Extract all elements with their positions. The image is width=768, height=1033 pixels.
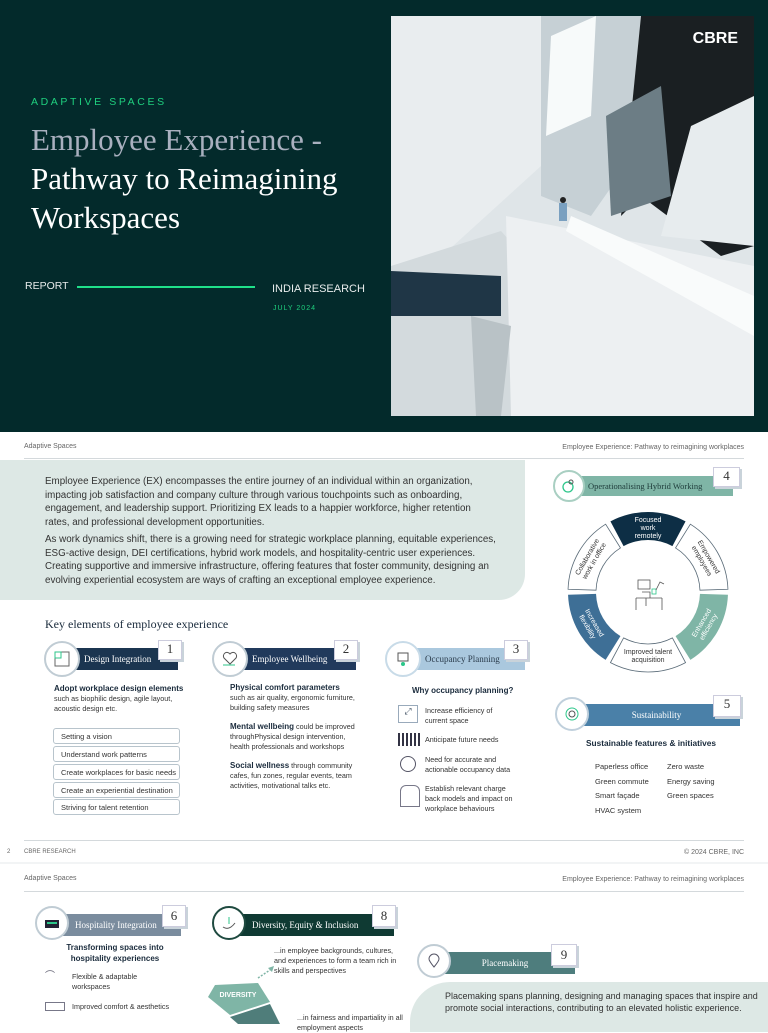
sustainability features: Sustainable features & initiatives	[586, 738, 716, 748]
banner 6: Hospitality Integration	[75, 920, 157, 930]
hybrid ring diagram: Focused	[635, 517, 662, 524]
number 9	[551, 944, 577, 966]
banner 5: Sustainability	[632, 710, 681, 720]
hospitality text: hospitality experiences	[71, 954, 159, 963]
hospitality text	[66, 943, 164, 963]
placemaking panel: Placemaking spans planning, designing and managing spaces that inspire and promote social interactions, contributing to an elevated holistic experience.	[445, 991, 758, 1013]
text: CBRE RESEARCH	[24, 849, 76, 855]
text: Green commute	[595, 776, 649, 786]
text: Increase efficiency of	[425, 706, 492, 715]
icon circle 4	[553, 470, 585, 502]
hybrid ring diagram: efficiency	[699, 612, 720, 642]
icon circle 2	[212, 641, 248, 677]
hybrid ring diagram: work	[640, 525, 656, 532]
text: Paperless office	[595, 762, 648, 771]
banner 8	[230, 914, 394, 936]
number 1: 1	[167, 641, 173, 656]
hybrid ring diagram: work in office	[581, 542, 608, 582]
text: 2	[7, 849, 10, 855]
icon circle 9	[417, 944, 451, 978]
number 4	[713, 467, 740, 487]
icon circle 3	[385, 641, 421, 677]
india research label: INDIA RESEARCH	[272, 283, 365, 295]
text: workspaces	[72, 982, 110, 991]
page 2 header: Adaptive Spaces	[24, 443, 77, 450]
cover title: Workspaces	[31, 200, 180, 235]
text: Energy saving	[667, 776, 715, 786]
hybrid ring diagram: Increased	[583, 608, 605, 638]
cover title: Employee Experience -	[31, 122, 322, 157]
text: ⌒	[45, 971, 55, 982]
banner 5	[573, 704, 740, 726]
wellbeing text: such as air quality, ergonomic furniture, building safety measures	[230, 693, 355, 712]
banner 4	[571, 476, 733, 496]
card 8: diversity, equity & inclusion	[212, 905, 398, 940]
text: Employee Experience: Pathway to reimagining workplaces	[562, 444, 744, 451]
DEI text: equity: ...in fairness and impartiality in all employment aspects	[297, 1013, 403, 1032]
text: Establish relevant charge	[425, 784, 506, 793]
icon circle 1	[44, 641, 80, 677]
sustainability features	[586, 738, 716, 814]
text: back models and impact on	[425, 794, 512, 803]
number 3	[504, 640, 528, 660]
text: Anticipate future needs	[425, 735, 499, 744]
DEI arc chart: DIVERSITY	[220, 992, 257, 999]
text: ⤢	[404, 706, 412, 716]
page 2 footer	[24, 840, 744, 841]
card 9: placemaking	[417, 944, 579, 978]
number 5: 5	[724, 696, 730, 711]
cover title: Pathway to Reimagining	[31, 161, 338, 196]
hybrid ring diagram: Collaborative	[575, 538, 601, 577]
text: current space	[425, 716, 469, 725]
banner 2	[230, 648, 356, 670]
number 1	[158, 640, 182, 660]
cover title	[31, 122, 338, 235]
icon circle 6	[35, 906, 69, 940]
date: JULY 2024	[273, 305, 316, 312]
card 1: design integration	[44, 640, 184, 677]
text: Create workplaces for basic needs	[61, 768, 176, 777]
card 4: operationalising hybrid working	[553, 467, 742, 502]
banner 8: Diversity, Equity & Inclusion	[252, 920, 358, 930]
occupancy list: Why occupancy planning?	[412, 686, 513, 695]
hybrid ring diagram: employees	[690, 545, 713, 578]
text: Flexible & adaptable	[72, 972, 137, 981]
heading: key elements: Key elements of employee experience	[45, 617, 228, 631]
text: Understand work patterns	[61, 750, 147, 759]
banner 9: Placemaking	[482, 958, 528, 968]
text: actionable occupancy data	[425, 765, 510, 774]
hybrid ring diagram: flexibility	[577, 614, 597, 641]
number 2	[334, 640, 358, 660]
text: Setting a vision	[61, 732, 112, 741]
hybrid ring diagram: Improved talent	[624, 649, 672, 656]
text: Need for accurate and	[425, 755, 496, 764]
hybrid ring diagram: Enhanced	[691, 608, 713, 639]
wellbeing text	[230, 683, 355, 790]
banner 3	[403, 648, 525, 670]
wellbeing text: Mental wellbeing could be improved throughPhysical design intervention, health professionals and workshops	[230, 722, 355, 751]
hospitality items	[45, 970, 169, 1011]
DEI text: diversity: ...in employee backgrounds, cultures, and experiences to form a team rich in skills and perspectives	[274, 946, 396, 975]
banner 1	[62, 648, 178, 670]
banner 1: Design Integration	[84, 654, 151, 664]
wellbeing text: Social wellness through community cafes, fun zones, regular events, team activities, motivational talks etc.	[230, 761, 352, 790]
card 2: employee wellbeing	[212, 640, 360, 677]
DEI arc chart	[208, 966, 280, 1024]
icon circle 5	[555, 697, 589, 731]
number 3: 3	[513, 641, 519, 656]
page 3 header: Adaptive Spaces	[24, 875, 77, 882]
banner 6	[53, 914, 181, 936]
cover photo	[391, 16, 754, 416]
number 6: 6	[171, 908, 177, 923]
icon circle 8	[212, 906, 246, 940]
hybrid ring diagram: remotely	[635, 533, 662, 540]
text: Striving for talent retention	[61, 803, 149, 812]
text: Employee Experience: Pathway to reimagining workplaces	[562, 876, 744, 883]
number 4: 4	[723, 468, 730, 483]
number 2: 2	[343, 641, 349, 656]
banner 2: Employee Wellbeing	[252, 654, 327, 664]
card 3: occupancy planning	[385, 640, 530, 677]
number 9: 9	[561, 947, 567, 962]
logo: CBRE	[693, 30, 738, 47]
design integration text: Adopt workplace design elements such as biophilic design, agile layout, acoustic design etc.	[54, 684, 183, 713]
banner 9	[435, 952, 575, 974]
occupancy list	[398, 686, 513, 813]
hybrid ring diagram	[568, 512, 728, 672]
card 5: sustainability	[555, 695, 743, 731]
intro panel: Employee Experience (EX) encompasses the entire journey of an individual within an organization, impacting job satisfaction and company culture through various touchpoints such as onboarding, engagement, and leadership support. Prioritizing EX leads to a happier workforce, higher retention rates, and professional development opportunities.	[45, 476, 472, 528]
number 5	[713, 695, 741, 717]
text: Zero waste	[667, 762, 704, 771]
kicker: adaptive spaces: ADAPTIVE SPACES	[31, 96, 167, 108]
text: Smart façade	[595, 791, 640, 800]
card 6: hospitality integration	[35, 905, 188, 940]
text: workplace behaviours	[425, 804, 495, 813]
intro panel	[0, 460, 525, 600]
hybrid ring diagram: acquisition	[631, 657, 665, 664]
banner 3: Occupancy Planning	[425, 654, 500, 664]
green rule	[77, 286, 255, 288]
cover page background	[0, 0, 768, 432]
wellbeing text: Physical comfort parameters	[230, 683, 340, 692]
text: © 2024 CBRE, INC	[684, 849, 744, 856]
placemaking panel	[410, 982, 768, 1032]
number 8: 8	[381, 908, 387, 923]
report label: REPORT	[25, 280, 69, 292]
text: Green spaces	[667, 791, 714, 800]
design steps list	[53, 728, 180, 815]
banner 4: Operationalising Hybrid Working	[588, 481, 702, 491]
hospitality text: Transforming spaces into	[66, 943, 164, 952]
text: Improved comfort & aesthetics	[72, 1002, 169, 1011]
intro panel: As work dynamics shift, there is a growing need for strategic workplace planning, equitable experiences, ESG-active design, DEI certifications, hybrid work models, and hospitality-centric user experiences. Creating supportive and immersive infrastructure, offering features that foster community, designing an evolving experiential ecosystem are ways of crafting an exceptional employee experience.	[45, 534, 496, 586]
hybrid ring diagram: Empowered	[696, 539, 721, 575]
text: HVAC system	[595, 806, 641, 814]
text: Create an experiential destination	[61, 786, 173, 795]
number 6	[162, 905, 186, 927]
number 8	[372, 905, 396, 927]
